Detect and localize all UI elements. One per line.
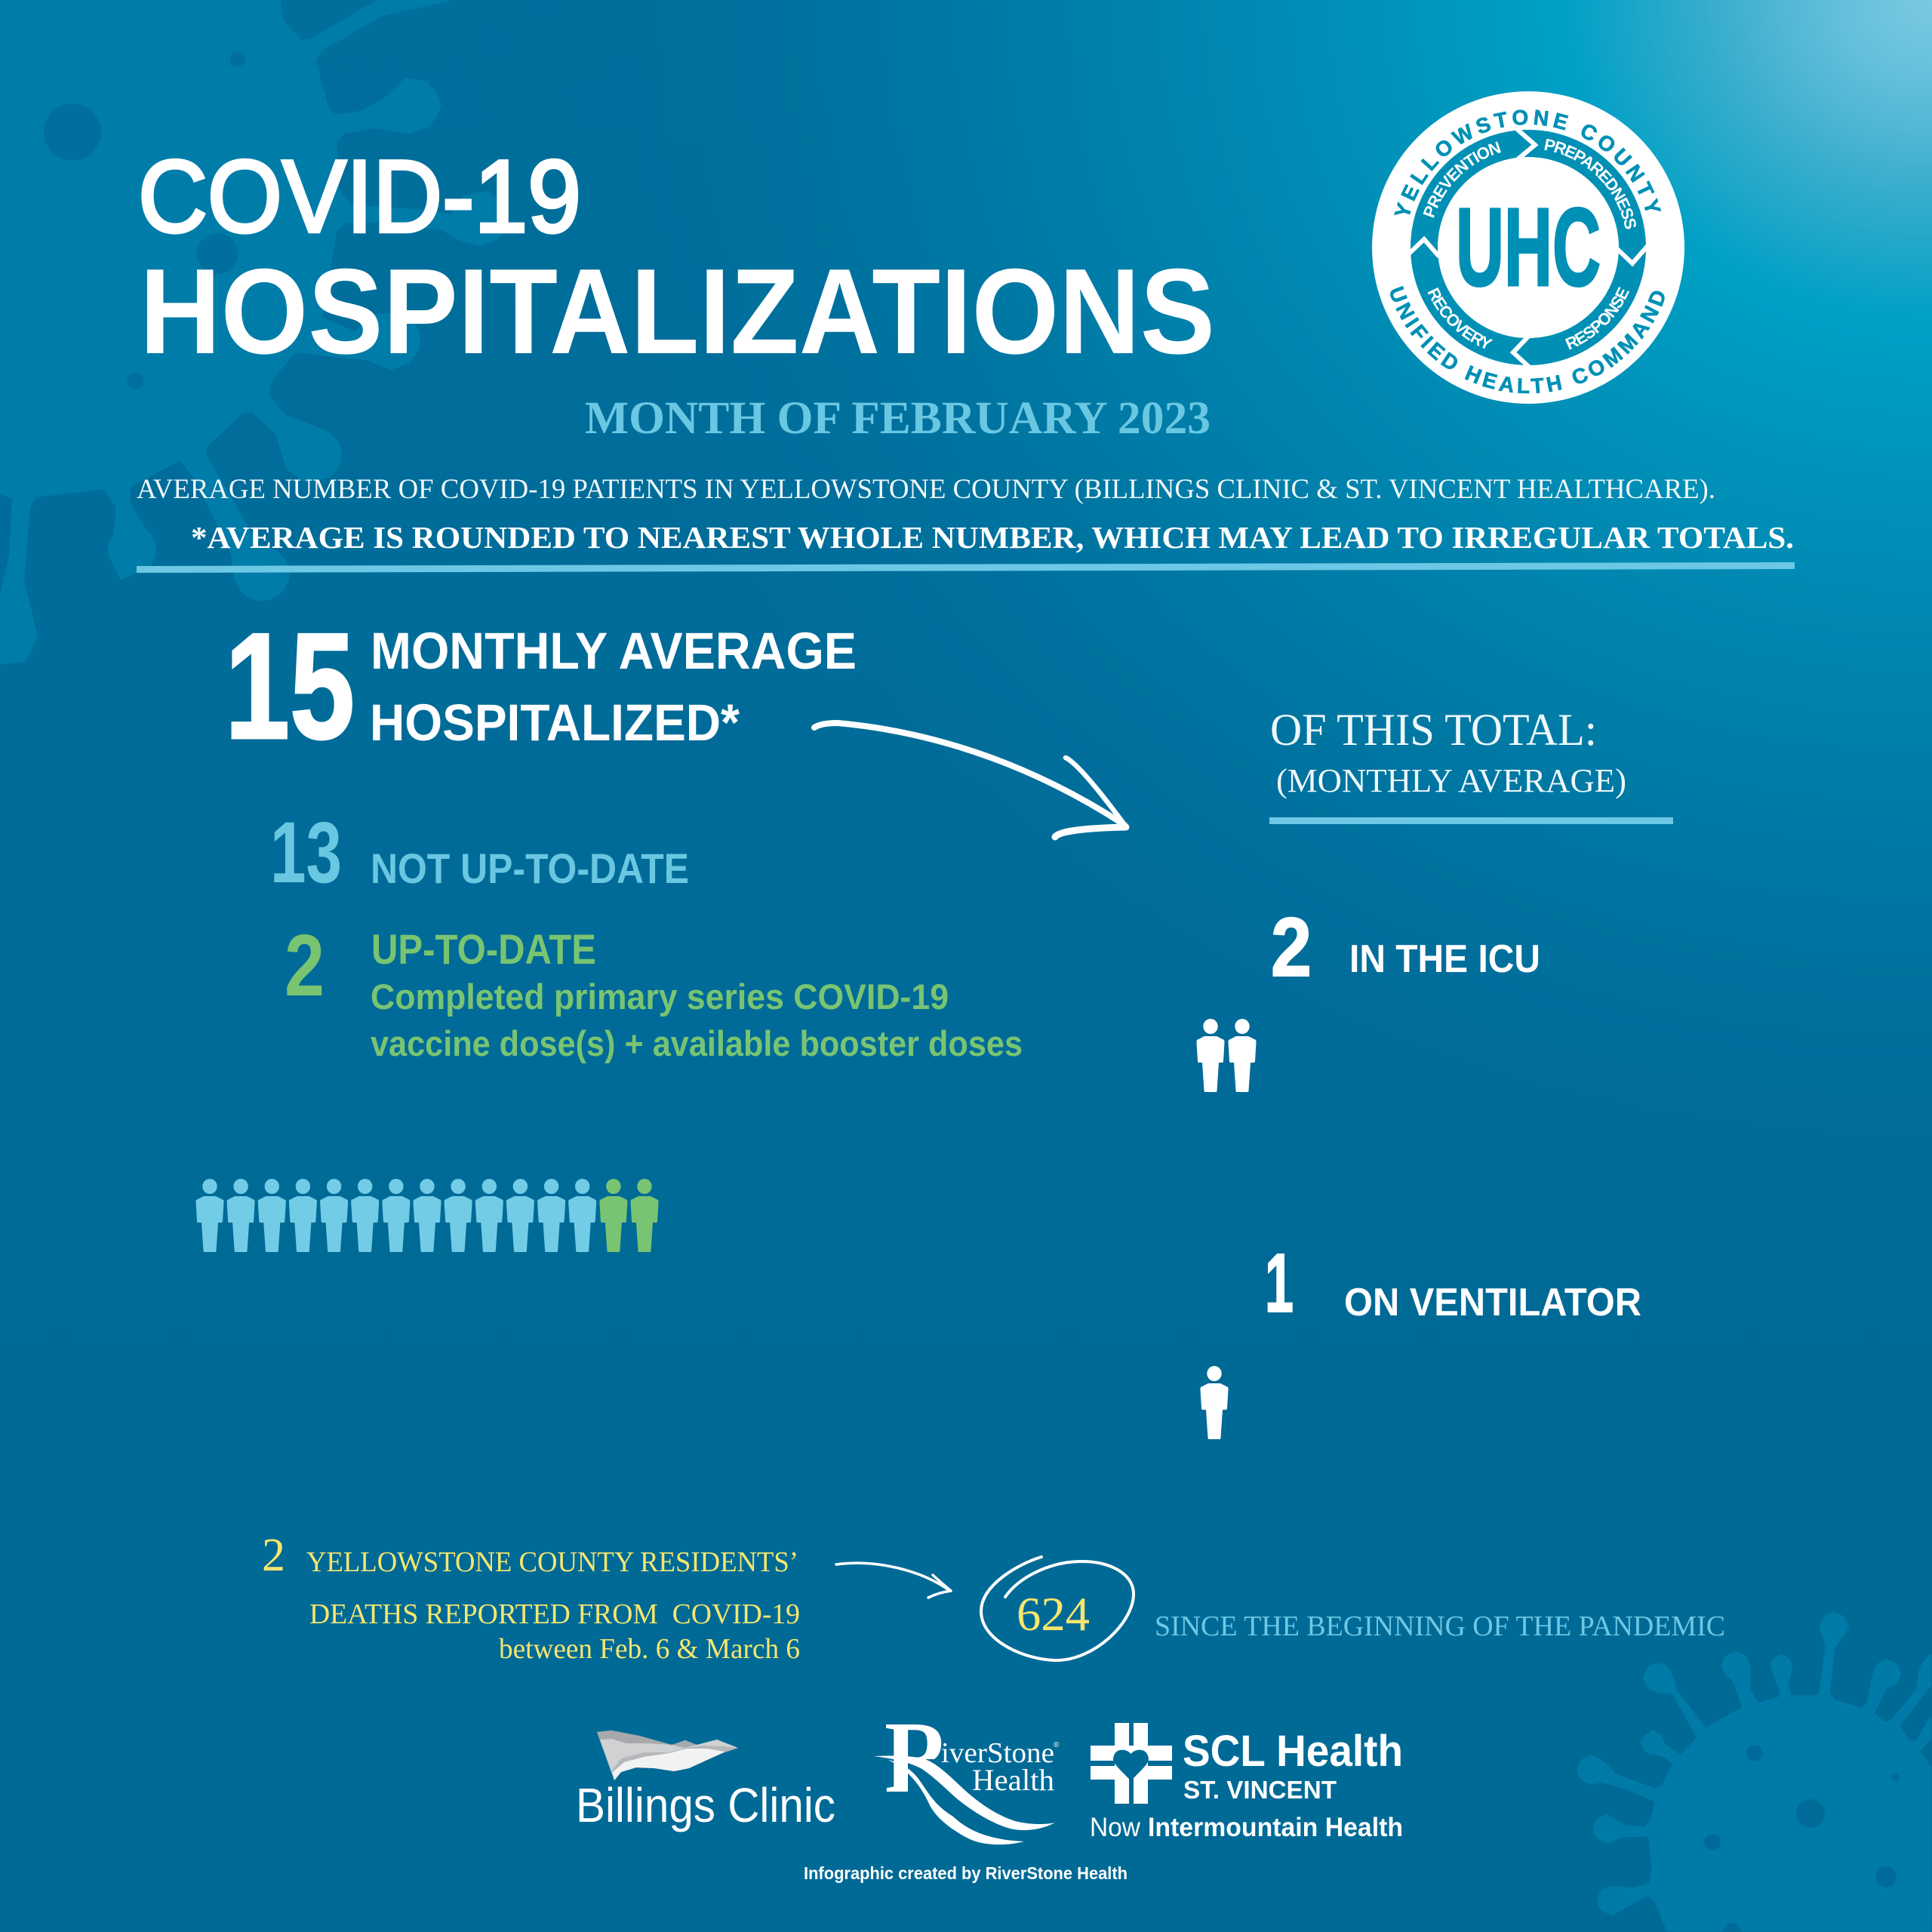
logo: Unified Health Command: PREPAREDNESS — [1544, 139, 1636, 229]
logo: SCL Health St. Vincent: Intermountain Health — [1148, 1813, 1403, 1842]
logo: RiverStone Health — [874, 1701, 1060, 1844]
stat: 15 monthly average hospitalized — [225, 602, 857, 771]
rounding note: *AVERAGE IS ROUNDED TO NEAREST WHOLE NUMBER, WHICH MAY LEAD TO IRREGULAR TOTALS. — [191, 520, 1794, 555]
icon: one white person — [1200, 1366, 1229, 1439]
deaths reported text: YELLOWSTONE COUNTY RESIDENTS’ — [306, 1546, 798, 1578]
background virus: bottom right — [1577, 1613, 1930, 1932]
logo: Unified Health Command: YELLOWSTONE COUNTY — [1394, 109, 1662, 216]
stat: 1 on ventilator — [1265, 1237, 1641, 1330]
logo: Unified Health Command: RESPONSE — [1565, 287, 1629, 350]
stat: 2 up-to-date: 2 — [285, 916, 325, 1014]
since the beginning label: SINCE THE BEGINNING OF THE PANDEMIC — [1155, 1611, 1725, 1642]
heading: of this total: OF THIS TOTAL: — [1270, 705, 1597, 755]
logo: RiverStone Health: Health — [972, 1763, 1054, 1797]
logo: SCL Health St. Vincent — [1090, 1723, 1403, 1842]
background virus: top left — [0, 0, 508, 663]
stat: 13 not up-to-date: 13 — [270, 804, 342, 901]
deaths reported text: between Feb. 6 & March 6 — [499, 1633, 800, 1665]
stat: 2 in the ICU: 2 — [1271, 901, 1312, 994]
stat: 15 monthly average hospitalized: HOSPITALIZED* — [370, 694, 740, 752]
logo: Unified Health Command: UHC — [1456, 186, 1601, 309]
logo: SCL Health St. Vincent: Now — [1090, 1813, 1141, 1842]
title: HOSPITALIZATIONS — [140, 244, 1215, 380]
stat: 13 not up-to-date: NOT UP-TO-DATE — [371, 844, 689, 892]
logo: SCL Health St. Vincent: SCL Health — [1183, 1727, 1403, 1776]
arrow: hand-drawn to total — [814, 723, 1126, 837]
heading: of this total — [1270, 705, 1626, 799]
deaths reported text: 2 — [262, 1530, 285, 1581]
deaths reported text — [262, 1530, 800, 1665]
icon: two white people — [1197, 1019, 1256, 1092]
title — [138, 139, 1215, 380]
subtitle: MONTH OF FEBRUARY 2023 — [585, 393, 1211, 444]
logo: RiverStone Health: iverStone — [941, 1737, 1054, 1769]
stat: 2 in the ICU: IN THE ICU — [1349, 937, 1540, 981]
logo: RiverStone Health: ® — [1054, 1741, 1060, 1749]
logo: SCL Health St. Vincent: ST. VINCENT — [1183, 1776, 1337, 1804]
pictogram row: 13 not up-to-date and 2 up-to-date — [196, 1179, 658, 1252]
logo: Unified Health Command: PREVENTION — [1423, 142, 1501, 218]
stat: 2 in the ICU — [1271, 901, 1540, 994]
heading: of this total: (MONTHLY AVERAGE) — [1276, 762, 1626, 799]
stat: 15 monthly average hospitalized: MONTHLY AVERAGE — [371, 622, 857, 680]
deaths reported text: DEATHS REPORTED FROM COVID-19 — [309, 1598, 800, 1630]
stat: 2 up-to-date: vaccine dose(s) + available booster doses — [371, 1023, 1023, 1063]
stat: 15 monthly average hospitalized: 15 — [225, 602, 355, 771]
credit line: Infographic created by RiverStone Health — [804, 1863, 1128, 1883]
circled total: 624 — [981, 1557, 1134, 1660]
circled total: 624: 624 — [1017, 1587, 1090, 1641]
title: COVID-19 — [138, 139, 581, 254]
logo: Unified Health Command — [1372, 91, 1684, 404]
logo: RiverStone Health: R — [884, 1701, 952, 1814]
logo: Unified Health Command: UNIFIED HEALTH COMMAND — [1390, 285, 1665, 394]
stat: 2 up-to-date — [285, 916, 1023, 1063]
stat: 1 on ventilator: ON VENTILATOR — [1344, 1281, 1641, 1324]
logo: Unified Health Command: RECOVERY — [1428, 287, 1493, 349]
logo: Billings Clinic: Billings Clinic — [576, 1778, 835, 1832]
logo: Billings Clinic — [576, 1730, 835, 1832]
stat: 1 on ventilator: 1 — [1265, 1237, 1294, 1330]
description line: AVERAGE NUMBER OF COVID-19 PATIENTS IN YELLOWSTONE COUNTY (BILLINGS CLINIC & ST. VINCENT HEALTHCARE). — [137, 474, 1715, 505]
arrow: to pandemic total — [836, 1563, 951, 1598]
stat: 2 up-to-date: Completed primary series COVID-19 — [371, 977, 949, 1017]
stat: 13 not up-to-date — [270, 804, 689, 901]
stat: 2 up-to-date: UP-TO-DATE — [371, 925, 596, 973]
